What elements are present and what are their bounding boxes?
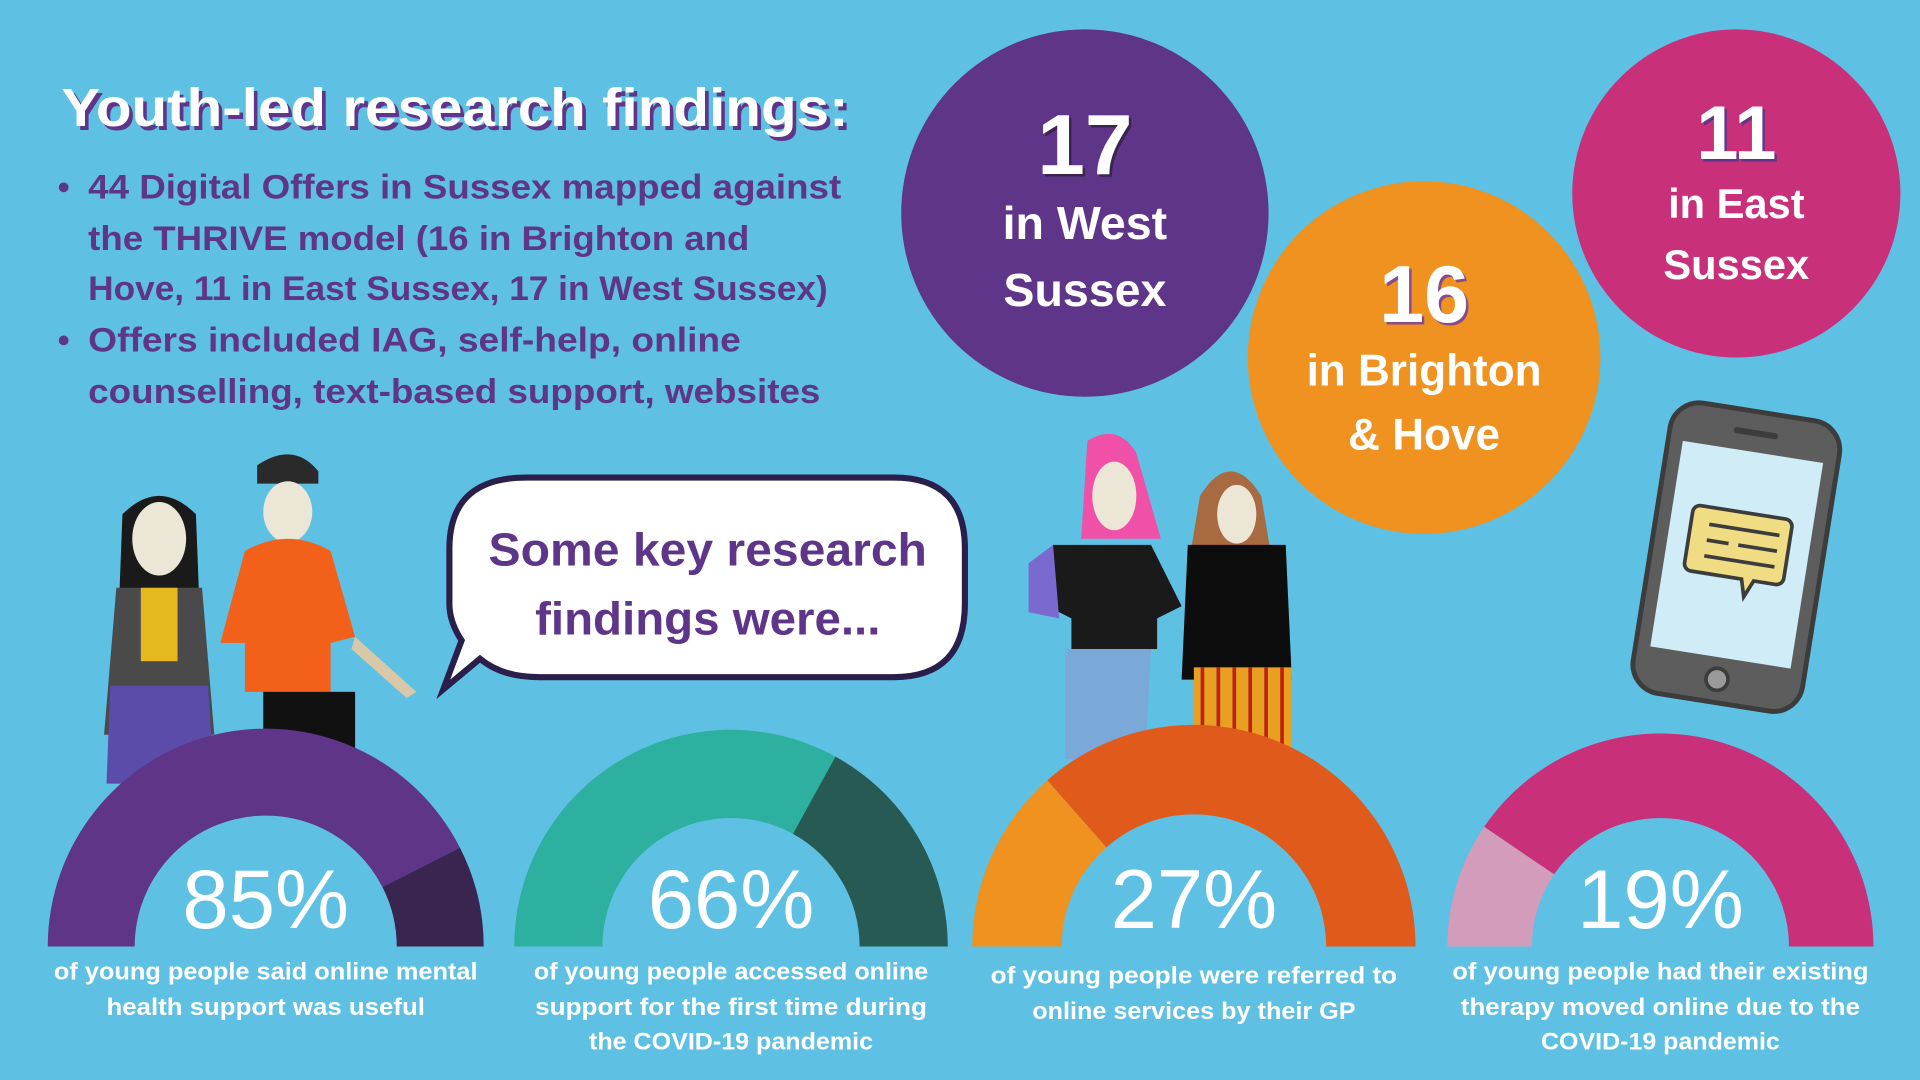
circle: East Sussex: 11 <box>1696 91 1776 176</box>
bullet list: Offers included IAG, self-help, online <box>88 321 741 359</box>
gauge: 66%: support for the first time during <box>535 994 927 1021</box>
gauge: 66%: of young people accessed online <box>534 959 928 986</box>
gauge: 66% <box>514 730 948 1055</box>
gauge: 27% <box>972 725 1416 1025</box>
icon: phone <box>1629 399 1844 716</box>
circle: West Sussex <box>901 29 1269 397</box>
circle: Brighton & Hove: in Brighton <box>1307 347 1542 396</box>
people: left pair <box>104 454 416 784</box>
speech bubble <box>443 478 965 689</box>
circle: East Sussex <box>1572 29 1900 358</box>
people: right pair <box>1029 434 1292 759</box>
bullet list: the THRIVE model (16 in Brighton and <box>88 220 749 258</box>
bullet list: Hove, 11 in East Sussex, 17 in West Sussex) <box>88 270 828 308</box>
circle: Brighton & Hove: 16 <box>1382 252 1471 342</box>
gauge: 27%: online services by their GP <box>1032 998 1356 1025</box>
bullet list: 44 Digital Offers in Sussex mapped against <box>88 168 841 206</box>
gauge: 85% <box>48 729 484 1021</box>
circle: Brighton & Hove: & Hove <box>1348 410 1500 459</box>
gauge: 19%: therapy moved online due to the <box>1461 994 1860 1021</box>
title: Youth-led research findings: <box>65 82 852 142</box>
gauge: 27%: 27% <box>1111 853 1277 946</box>
circle: West Sussex: in West <box>1003 197 1167 249</box>
gauge: 19%: of young people had their existing <box>1452 959 1869 986</box>
title: Youth-led research findings: <box>61 78 849 138</box>
circle: East Sussex: Sussex <box>1663 241 1809 288</box>
circle: Brighton & Hove: 16 <box>1379 250 1469 340</box>
gauge: 85%: of young people said online mental <box>54 959 478 986</box>
gauge: 85%: 85% <box>182 853 349 946</box>
speech bubble: findings were... <box>535 592 880 644</box>
bullet list <box>59 168 841 411</box>
circle: East Sussex: 11 <box>1699 94 1779 179</box>
circle: West Sussex: 17 <box>1037 97 1133 193</box>
bullet list: counselling, text-based support, websites <box>88 373 820 411</box>
gauge: 66%: the COVID-19 pandemic <box>589 1028 873 1055</box>
gauge: 85%: health support was useful <box>107 994 425 1021</box>
speech bubble: Some key research <box>489 524 927 576</box>
gauge: 19%: COVID-19 pandemic <box>1541 1028 1780 1055</box>
gauge: 27%: of young people were referred to <box>991 962 1397 989</box>
circle: East Sussex: in East <box>1668 180 1805 227</box>
circle: West Sussex: 17 <box>1040 99 1135 195</box>
gauge: 66%: 66% <box>648 853 814 946</box>
gauge: 19% <box>1447 733 1873 1055</box>
circle: West Sussex: Sussex <box>1003 264 1166 316</box>
gauge: 19%: 19% <box>1577 853 1744 946</box>
circle: Brighton & Hove <box>1248 181 1600 534</box>
